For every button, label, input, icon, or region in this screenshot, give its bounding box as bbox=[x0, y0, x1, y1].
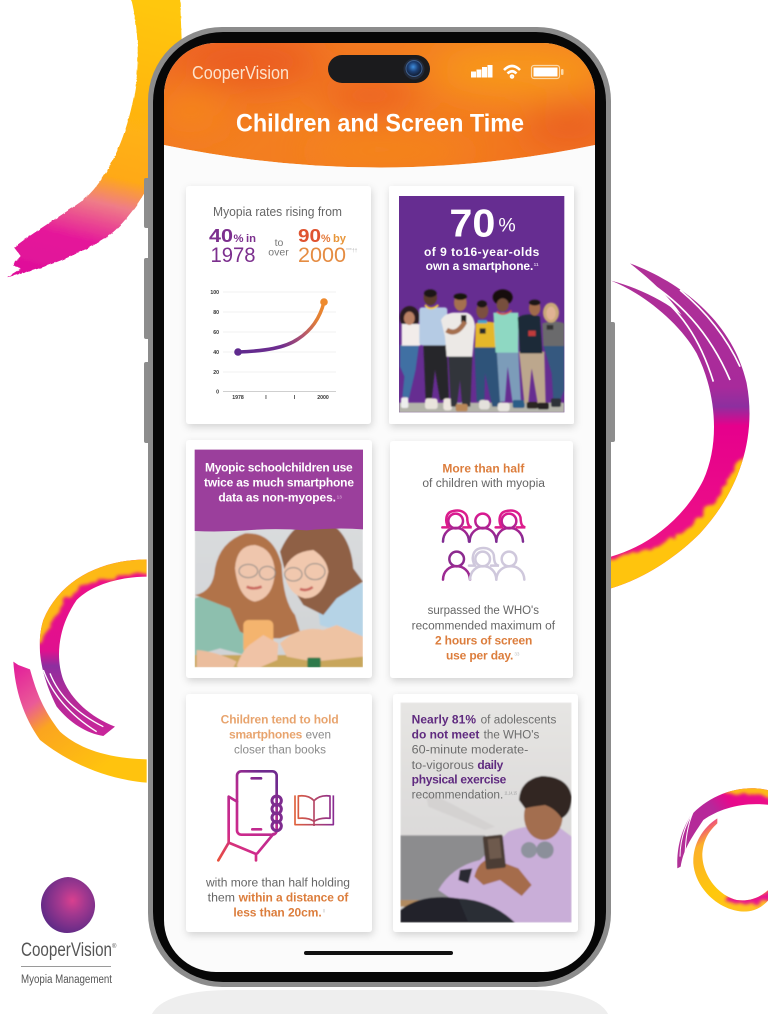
icon: hand holding phone bbox=[218, 771, 281, 860]
text: myopic schoolchildren: 13 bbox=[337, 494, 342, 499]
stat: 40% in 1978: % bbox=[234, 233, 244, 245]
person 5 bbox=[493, 289, 525, 408]
brand name in header: CooperVision bbox=[192, 63, 289, 83]
title: Children and Screen Time bbox=[236, 110, 524, 138]
brush stroke: left lower sweep bbox=[13, 662, 147, 783]
brush stroke: left ring bbox=[40, 559, 147, 736]
phone bbox=[144, 27, 615, 987]
text: surpassed WHO maximum bbox=[412, 603, 556, 662]
panel: myopia rates chart card bbox=[186, 186, 371, 424]
text: surpassed WHO maximum: surpassed the WHO's bbox=[428, 603, 539, 617]
text: within a distance bbox=[205, 876, 350, 920]
text: nearly 81% of adolescents: of adolescents bbox=[481, 712, 556, 726]
text: children hold smartphones closer: smartphones bbox=[229, 728, 303, 742]
text: myopic schoolchildren bbox=[204, 461, 354, 505]
stat: 70% bbox=[449, 202, 516, 246]
phone floor reflection bbox=[152, 990, 608, 1014]
photo: teenagers with phones bbox=[399, 289, 564, 413]
text: surpassed WHO maximum: recommended maximum of bbox=[412, 618, 556, 632]
stat: 90% by 2000: 90 bbox=[298, 226, 321, 246]
phone body bbox=[148, 27, 611, 987]
icon: open book bbox=[295, 795, 333, 826]
text: within a distance: ‖ bbox=[323, 909, 325, 914]
text: more than half: of children with myopia bbox=[422, 476, 545, 490]
text: to over: to bbox=[275, 237, 284, 249]
logo: CooperVision Myopia Management: ® bbox=[112, 943, 117, 950]
line chart: 40 bbox=[213, 350, 219, 356]
stat: 90% by 2000 bbox=[298, 226, 358, 267]
stat: 90% by 2000: ***†† bbox=[346, 248, 358, 254]
text: nearly 81% of adolescents: 60-minute moderate- bbox=[412, 743, 528, 757]
camera island bbox=[328, 55, 430, 83]
text: of 9 to 16-year-olds: own a smartphone. bbox=[426, 259, 533, 273]
home indicator bbox=[304, 951, 453, 955]
line chart: 20 bbox=[213, 370, 219, 376]
heading: myopia rates: Myopia rates rising from bbox=[213, 205, 342, 219]
brush stroke: right arc bbox=[611, 264, 750, 588]
stat: 40% in 1978: 1978 bbox=[210, 244, 256, 267]
header banner bbox=[164, 43, 595, 168]
status icons bbox=[471, 65, 564, 78]
stat: 40% in 1978: 40 bbox=[209, 226, 233, 246]
line chart bbox=[210, 290, 336, 401]
stat: 90% by 2000: % bbox=[321, 233, 331, 245]
text: to over: over bbox=[268, 246, 289, 258]
text: nearly 81% of adolescents: physical exercise bbox=[412, 773, 507, 787]
text: children hold smartphones closer: Children tend to hold bbox=[221, 712, 339, 726]
text: nearly 81% of adolescents bbox=[412, 712, 556, 802]
person 2 bbox=[419, 289, 452, 410]
text: surpassed WHO maximum: 2 hours of screen bbox=[435, 633, 532, 647]
line chart: 1978 bbox=[232, 395, 244, 401]
panel: more than half of children bbox=[390, 441, 573, 678]
text: of 9 to 16-year-olds: 11 bbox=[534, 262, 539, 267]
panel: 70 percent own a smartphone bbox=[389, 186, 574, 424]
phone screen bbox=[164, 43, 595, 972]
stat: 40% in 1978: in bbox=[246, 233, 256, 245]
person 4 bbox=[474, 300, 510, 411]
wifi bbox=[504, 66, 520, 78]
photo: two girls with phone bbox=[194, 528, 363, 668]
text: nearly 81% of adolescents: do not meet bbox=[412, 728, 479, 742]
icon: group of children bbox=[442, 511, 525, 580]
text: within a distance: within a distance of bbox=[238, 890, 349, 904]
stat: 90% by 2000: by bbox=[333, 233, 347, 245]
phone side buttons bbox=[144, 178, 615, 443]
text: nearly 81% of adolescents: Nearly 81% bbox=[412, 712, 476, 726]
brush stroke: top left bbox=[7, 0, 182, 277]
person 6 bbox=[518, 300, 549, 409]
icon: purple sphere bbox=[41, 877, 95, 933]
line chart: 60 bbox=[213, 330, 219, 336]
text: of 9 to 16-year-olds bbox=[424, 245, 540, 273]
stat: 70%: 70 bbox=[449, 202, 495, 246]
logo: CooperVision Myopia Management bbox=[21, 877, 117, 986]
stat: 40% in 1978 bbox=[209, 226, 256, 267]
text: nearly 81% of adolescents: 11,14,15 bbox=[504, 791, 517, 796]
text: surpassed WHO maximum: use per day. bbox=[446, 648, 513, 662]
text: more than half: More than half bbox=[442, 461, 525, 475]
panel: myopic schoolchildren data use bbox=[186, 440, 372, 678]
icon: top row bbox=[442, 511, 525, 542]
text: nearly 81% of adolescents: daily bbox=[477, 758, 504, 772]
text: myopic schoolchildren: twice as much smartphone bbox=[204, 476, 354, 490]
line chart: I bbox=[294, 395, 296, 401]
text: within a distance: them bbox=[208, 890, 235, 904]
text: within a distance: less than 20cm. bbox=[233, 906, 322, 920]
icon: bottom row bbox=[443, 548, 524, 580]
stat: 70%: % bbox=[498, 216, 516, 237]
line chart: I bbox=[265, 395, 267, 401]
line chart: 100 bbox=[210, 290, 219, 296]
person 1 bbox=[400, 306, 420, 408]
person 3 bbox=[441, 293, 475, 411]
text: children hold smartphones closer: closer than books bbox=[234, 743, 326, 757]
text: within a distance: with more than half holding bbox=[205, 876, 350, 890]
logo wordmark: CooperVision bbox=[21, 940, 112, 961]
logo subtitle: Myopia Management bbox=[21, 974, 113, 986]
text: of 9 to 16-year-olds: of 9 to16-year-olds bbox=[424, 245, 540, 259]
text: children hold smartphones closer: even bbox=[306, 728, 331, 742]
signal bars bbox=[471, 65, 492, 78]
line chart: 80 bbox=[213, 310, 219, 316]
text: nearly 81% of adolescents: the WHO's bbox=[484, 728, 539, 742]
text: more than half bbox=[422, 461, 545, 490]
line chart: 0 bbox=[216, 390, 219, 396]
panel: adolescents physical exercise bbox=[393, 694, 578, 932]
text: myopic schoolchildren: data as non-myopes. bbox=[218, 491, 336, 505]
text: surpassed WHO maximum: 33 bbox=[514, 652, 520, 657]
text: to over bbox=[268, 237, 289, 258]
brush stroke: bottom right ring bbox=[677, 788, 768, 912]
photo: teen with phone on sofa bbox=[400, 702, 572, 923]
battery bbox=[532, 66, 564, 78]
text: myopic schoolchildren: Myopic schoolchildren use bbox=[205, 461, 353, 475]
text: nearly 81% of adolescents: to-vigorous bbox=[412, 758, 474, 772]
text: nearly 81% of adolescents: recommendation. bbox=[412, 788, 503, 802]
person 7 bbox=[542, 303, 564, 407]
panel: smartphones closer than books bbox=[186, 694, 372, 932]
stat: 90% by 2000: 2000 bbox=[298, 244, 346, 267]
line chart: 2000 bbox=[317, 395, 329, 401]
text: children hold smartphones closer bbox=[221, 712, 339, 757]
